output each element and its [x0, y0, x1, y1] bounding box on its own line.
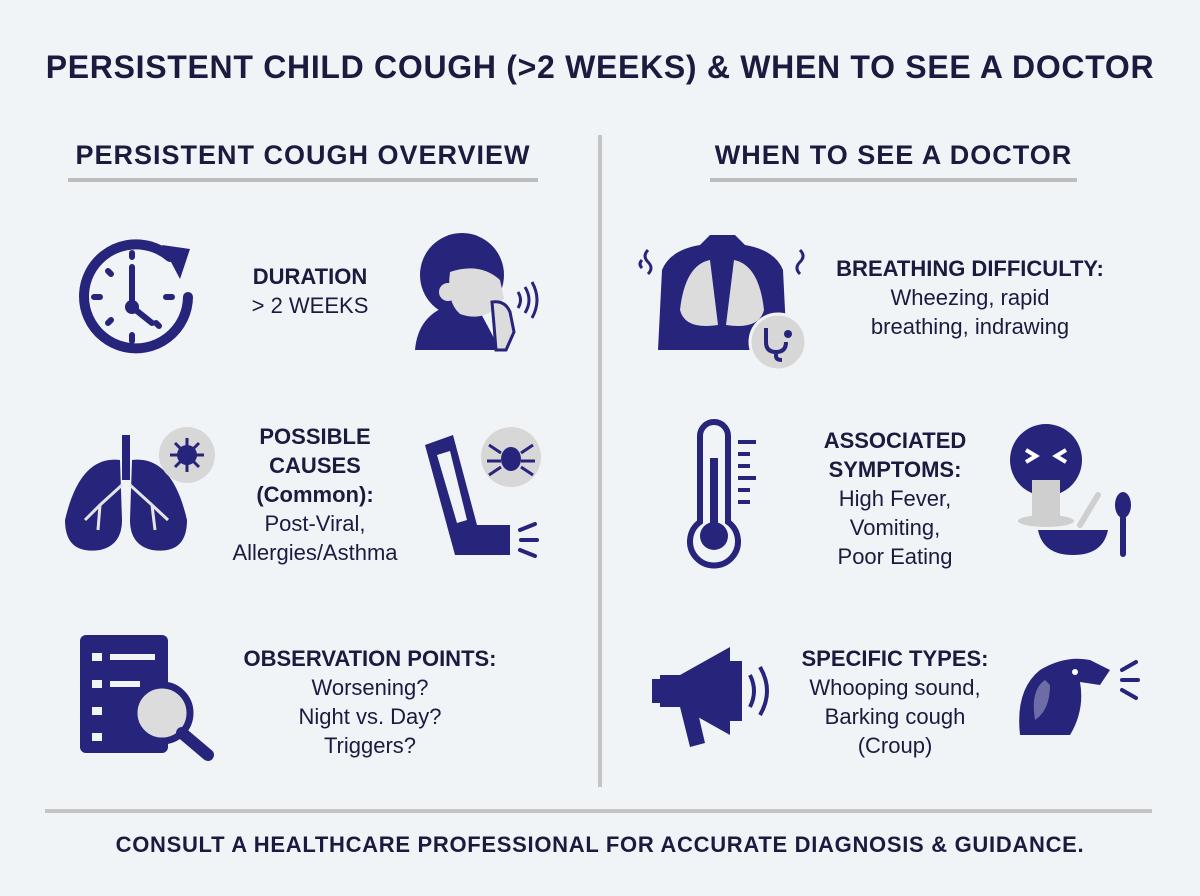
text: associated: Poor Eating: [838, 544, 952, 569]
text: breathing: [836, 256, 1104, 339]
heading: doctor: [710, 140, 1077, 182]
text: associated: High Fever,: [839, 486, 951, 511]
vertical divider: [598, 135, 602, 787]
text: duration: [252, 264, 368, 318]
text: specific types: Barking cough: [825, 704, 965, 729]
footer: CONSULT A HEALTHCARE PROFESSIONAL FOR ACCURATE DIAGNOSIS & GUIDANCE.: [116, 832, 1084, 857]
icon: vomiting face and bowl: [1010, 424, 1131, 557]
icon: megaphone: [652, 647, 769, 747]
text: specific types: (Croup): [858, 733, 932, 758]
heading: overview: [68, 140, 538, 182]
bottom divider: [45, 809, 1152, 813]
text: associated: Vomiting,: [850, 515, 940, 540]
icon: thermometer: [686, 419, 756, 568]
text: causes: CAUSES: [269, 453, 361, 478]
text: associated: ASSOCIATED: [824, 428, 966, 453]
text: causes: Post-Viral,: [264, 511, 366, 536]
text: specific types: SPECIFIC TYPES:: [801, 646, 989, 671]
text: duration: DURATION: [253, 264, 367, 289]
icon: inhaler: [425, 427, 541, 558]
icon: torso lungs stethoscope: [638, 235, 805, 368]
text: causes: POSSIBLE: [259, 424, 371, 449]
text: breathing: BREATHING DIFFICULTY:: [836, 256, 1104, 281]
heading: overview: PERSISTENT COUGH OVERVIEW: [75, 140, 531, 170]
text: specific types: [801, 646, 989, 758]
text: duration: > 2 WEEKS: [252, 293, 368, 318]
text: associated: SYMPTOMS:: [829, 457, 961, 482]
icon: clock: [79, 239, 193, 354]
text: observation: Night vs. Day?: [298, 704, 442, 729]
heading: doctor: WHEN TO SEE A DOCTOR: [715, 140, 1072, 170]
icon: coughing child: [415, 233, 538, 352]
text: causes: (Common):: [256, 482, 374, 507]
text: specific types: Whooping sound,: [809, 675, 981, 700]
icon: lungs with virus: [65, 427, 215, 551]
text: observation: OBSERVATION POINTS:: [243, 646, 497, 671]
text: breathing: Wheezing, rapid: [890, 285, 1049, 310]
text: causes: [232, 424, 398, 565]
text: observation: [243, 646, 497, 758]
text: observation: Triggers?: [324, 733, 416, 758]
icon: document with magnifier: [80, 635, 214, 761]
text: breathing: breathing, indrawing: [871, 314, 1069, 339]
text: causes: Allergies/Asthma: [232, 540, 398, 565]
text: observation: Worsening?: [312, 675, 428, 700]
text: associated: [824, 428, 966, 569]
icon: barking dog: [1019, 658, 1140, 735]
title: PERSISTENT CHILD COUGH (>2 WEEKS) & WHEN TO SEE A DOCTOR: [46, 49, 1154, 85]
